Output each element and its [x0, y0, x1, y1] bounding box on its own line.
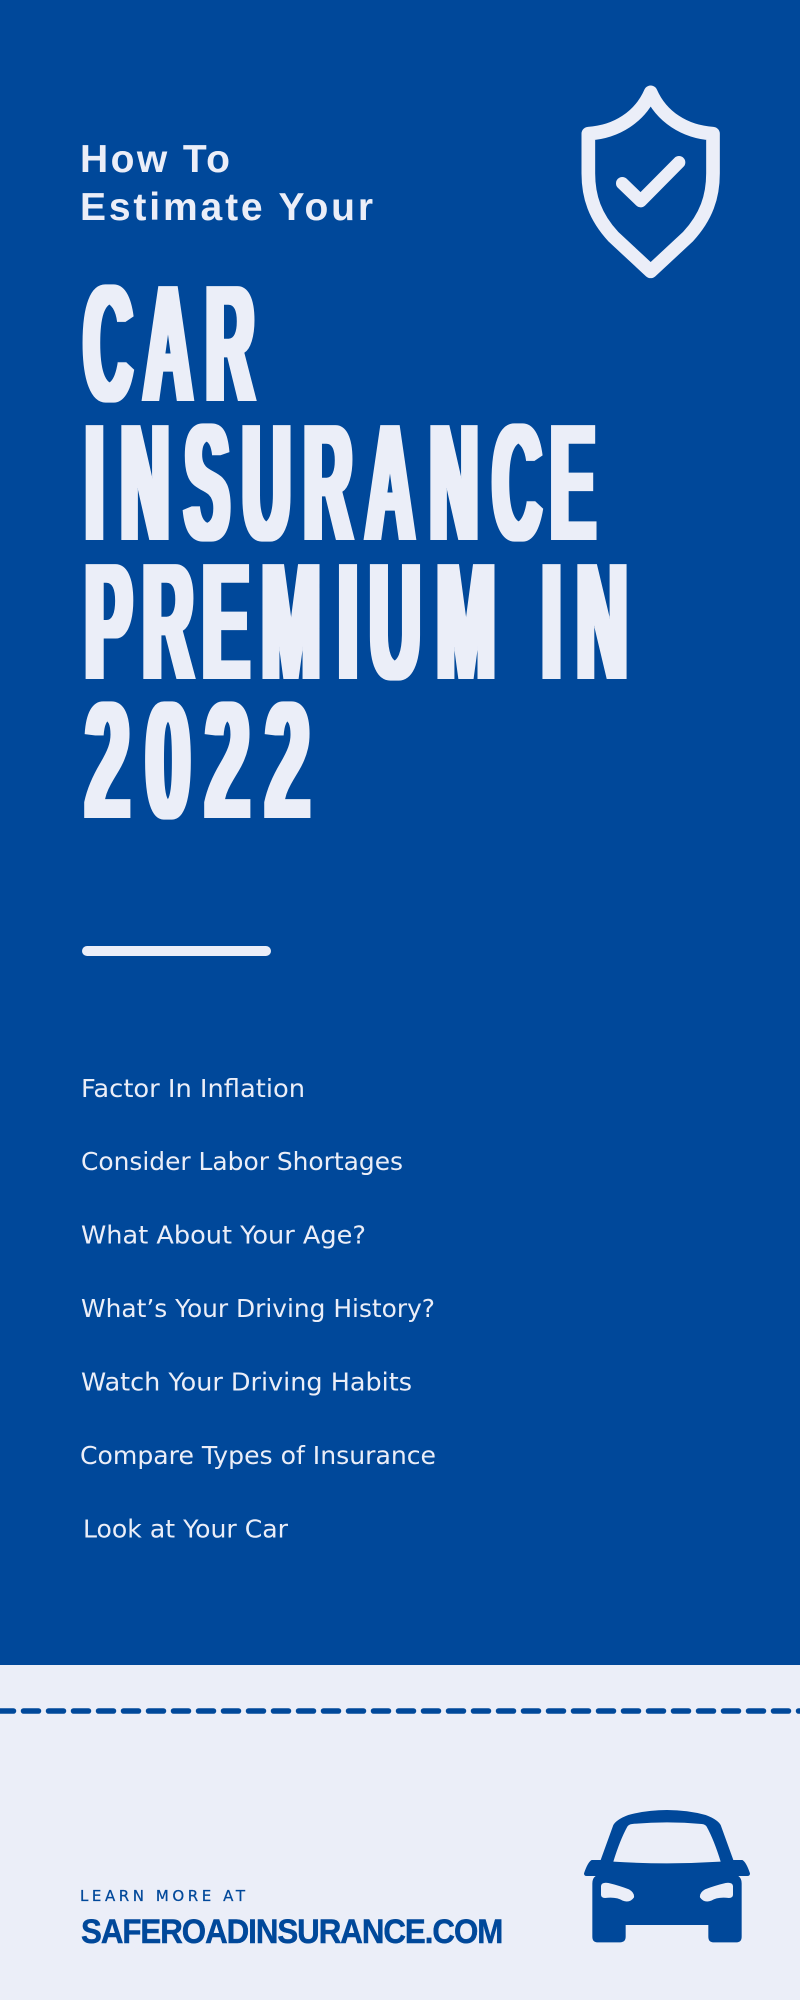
subtitle [80, 138, 373, 229]
list item: car: Look at Your Car [83, 1514, 289, 1544]
list item: driving history: What’s Your Driving History? [81, 1294, 435, 1323]
title: INSURANCE [85, 389, 595, 575]
divider bar [82, 946, 271, 956]
panel: light footer background [0, 1665, 800, 2000]
title: CAR [84, 250, 254, 436]
footer call to action label: LEARN MORE AT [80, 1887, 246, 1905]
icon: shield with check mark [588, 92, 713, 271]
title [84, 250, 627, 854]
subtitle: Estimate Your [80, 186, 373, 229]
list item: labor shortages: Consider Labor Shortages [81, 1147, 403, 1176]
dashed separator [0, 1708, 800, 1714]
list of factors [80, 1074, 436, 1544]
icon: car front view [584, 1810, 750, 1942]
title: PREMIUM IN [85, 529, 627, 716]
footer website: SAFEROADINSURANCE.COM [81, 1912, 503, 1950]
subtitle: How To [80, 138, 230, 181]
title: 2022 [85, 667, 310, 854]
list item: driving habits: Watch Your Driving Habits [81, 1368, 412, 1397]
list item: age: What About Your Age? [81, 1221, 366, 1250]
list item: inflation: Factor In Inflation [81, 1074, 305, 1103]
list item: insurance types: Compare Types of Insurance [80, 1441, 436, 1470]
